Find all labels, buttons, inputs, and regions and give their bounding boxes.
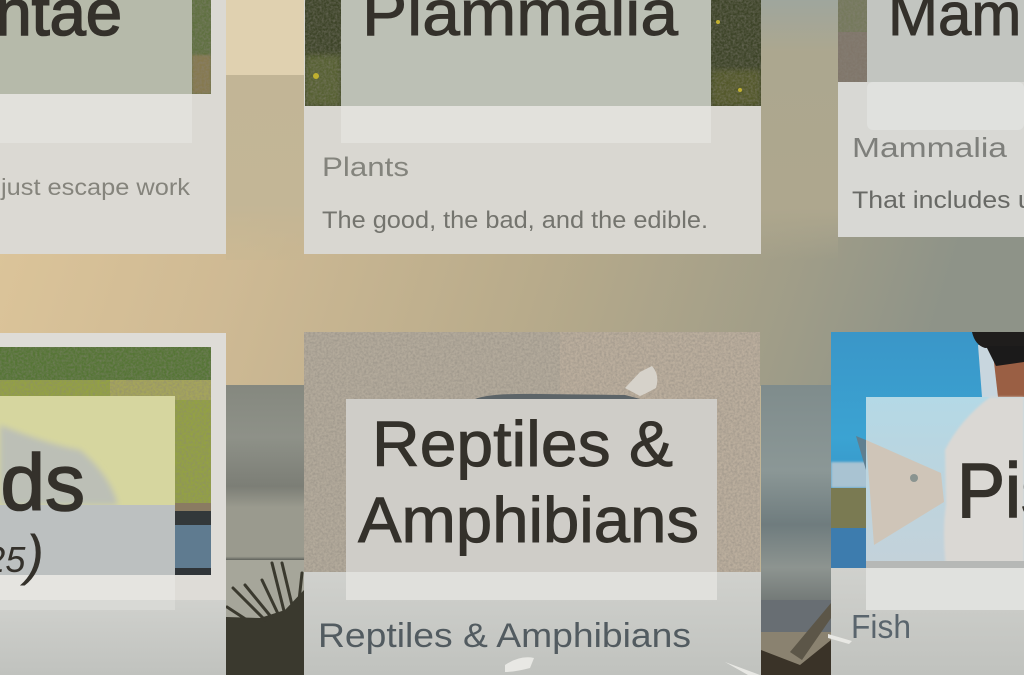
card: Reptiles and Amphibians bbox=[304, 332, 761, 675]
title: Reptiles and Amphibians: Reptiles & bbox=[372, 408, 673, 480]
species count: ) bbox=[19, 523, 44, 586]
palm silhouette bbox=[226, 563, 304, 675]
beach chair bbox=[761, 603, 831, 675]
card: Birds bbox=[0, 333, 226, 675]
card: Plantae bbox=[0, 0, 226, 254]
title: Reptiles and Amphibians: Amphibians bbox=[358, 484, 699, 556]
subtitle: Mammalia: Mammalia bbox=[852, 132, 1008, 163]
title panel: Birds bbox=[0, 396, 175, 610]
photo: Mammalia bbox=[838, 0, 867, 82]
description: Plantae: just escape work bbox=[0, 174, 190, 200]
title panel: Plantae bbox=[0, 0, 192, 143]
title: Reptiles and Amphibians bbox=[358, 408, 699, 556]
title panel: Plants bbox=[341, 0, 711, 143]
card: Fish bbox=[828, 332, 1024, 675]
description: Mammalia: That includes us bbox=[852, 187, 1024, 214]
photo: Fish bbox=[831, 332, 1024, 568]
subtitle: Plants: Plants bbox=[322, 152, 409, 182]
photo: Birds bbox=[0, 347, 211, 575]
glare streak bbox=[828, 634, 852, 644]
glare streaks bbox=[505, 657, 760, 675]
title panel: Fish bbox=[866, 397, 1024, 610]
photo: Plants bbox=[305, 0, 761, 106]
card: Mammalia bbox=[838, 0, 1024, 237]
photo: Plantae bbox=[192, 0, 211, 94]
title panel: Reptiles and Amphibians bbox=[346, 399, 717, 600]
subtitle: Reptiles and Amphibians: Reptiles & Amphibians bbox=[318, 617, 691, 655]
card: Plants bbox=[304, 0, 761, 254]
subtitle: Fish: Fish bbox=[851, 608, 911, 645]
photo: Reptiles and Amphibians bbox=[304, 332, 760, 572]
description: Plants: The good, the bad, and the edible. bbox=[322, 207, 708, 234]
title panel: Mammalia bbox=[867, 0, 1024, 130]
